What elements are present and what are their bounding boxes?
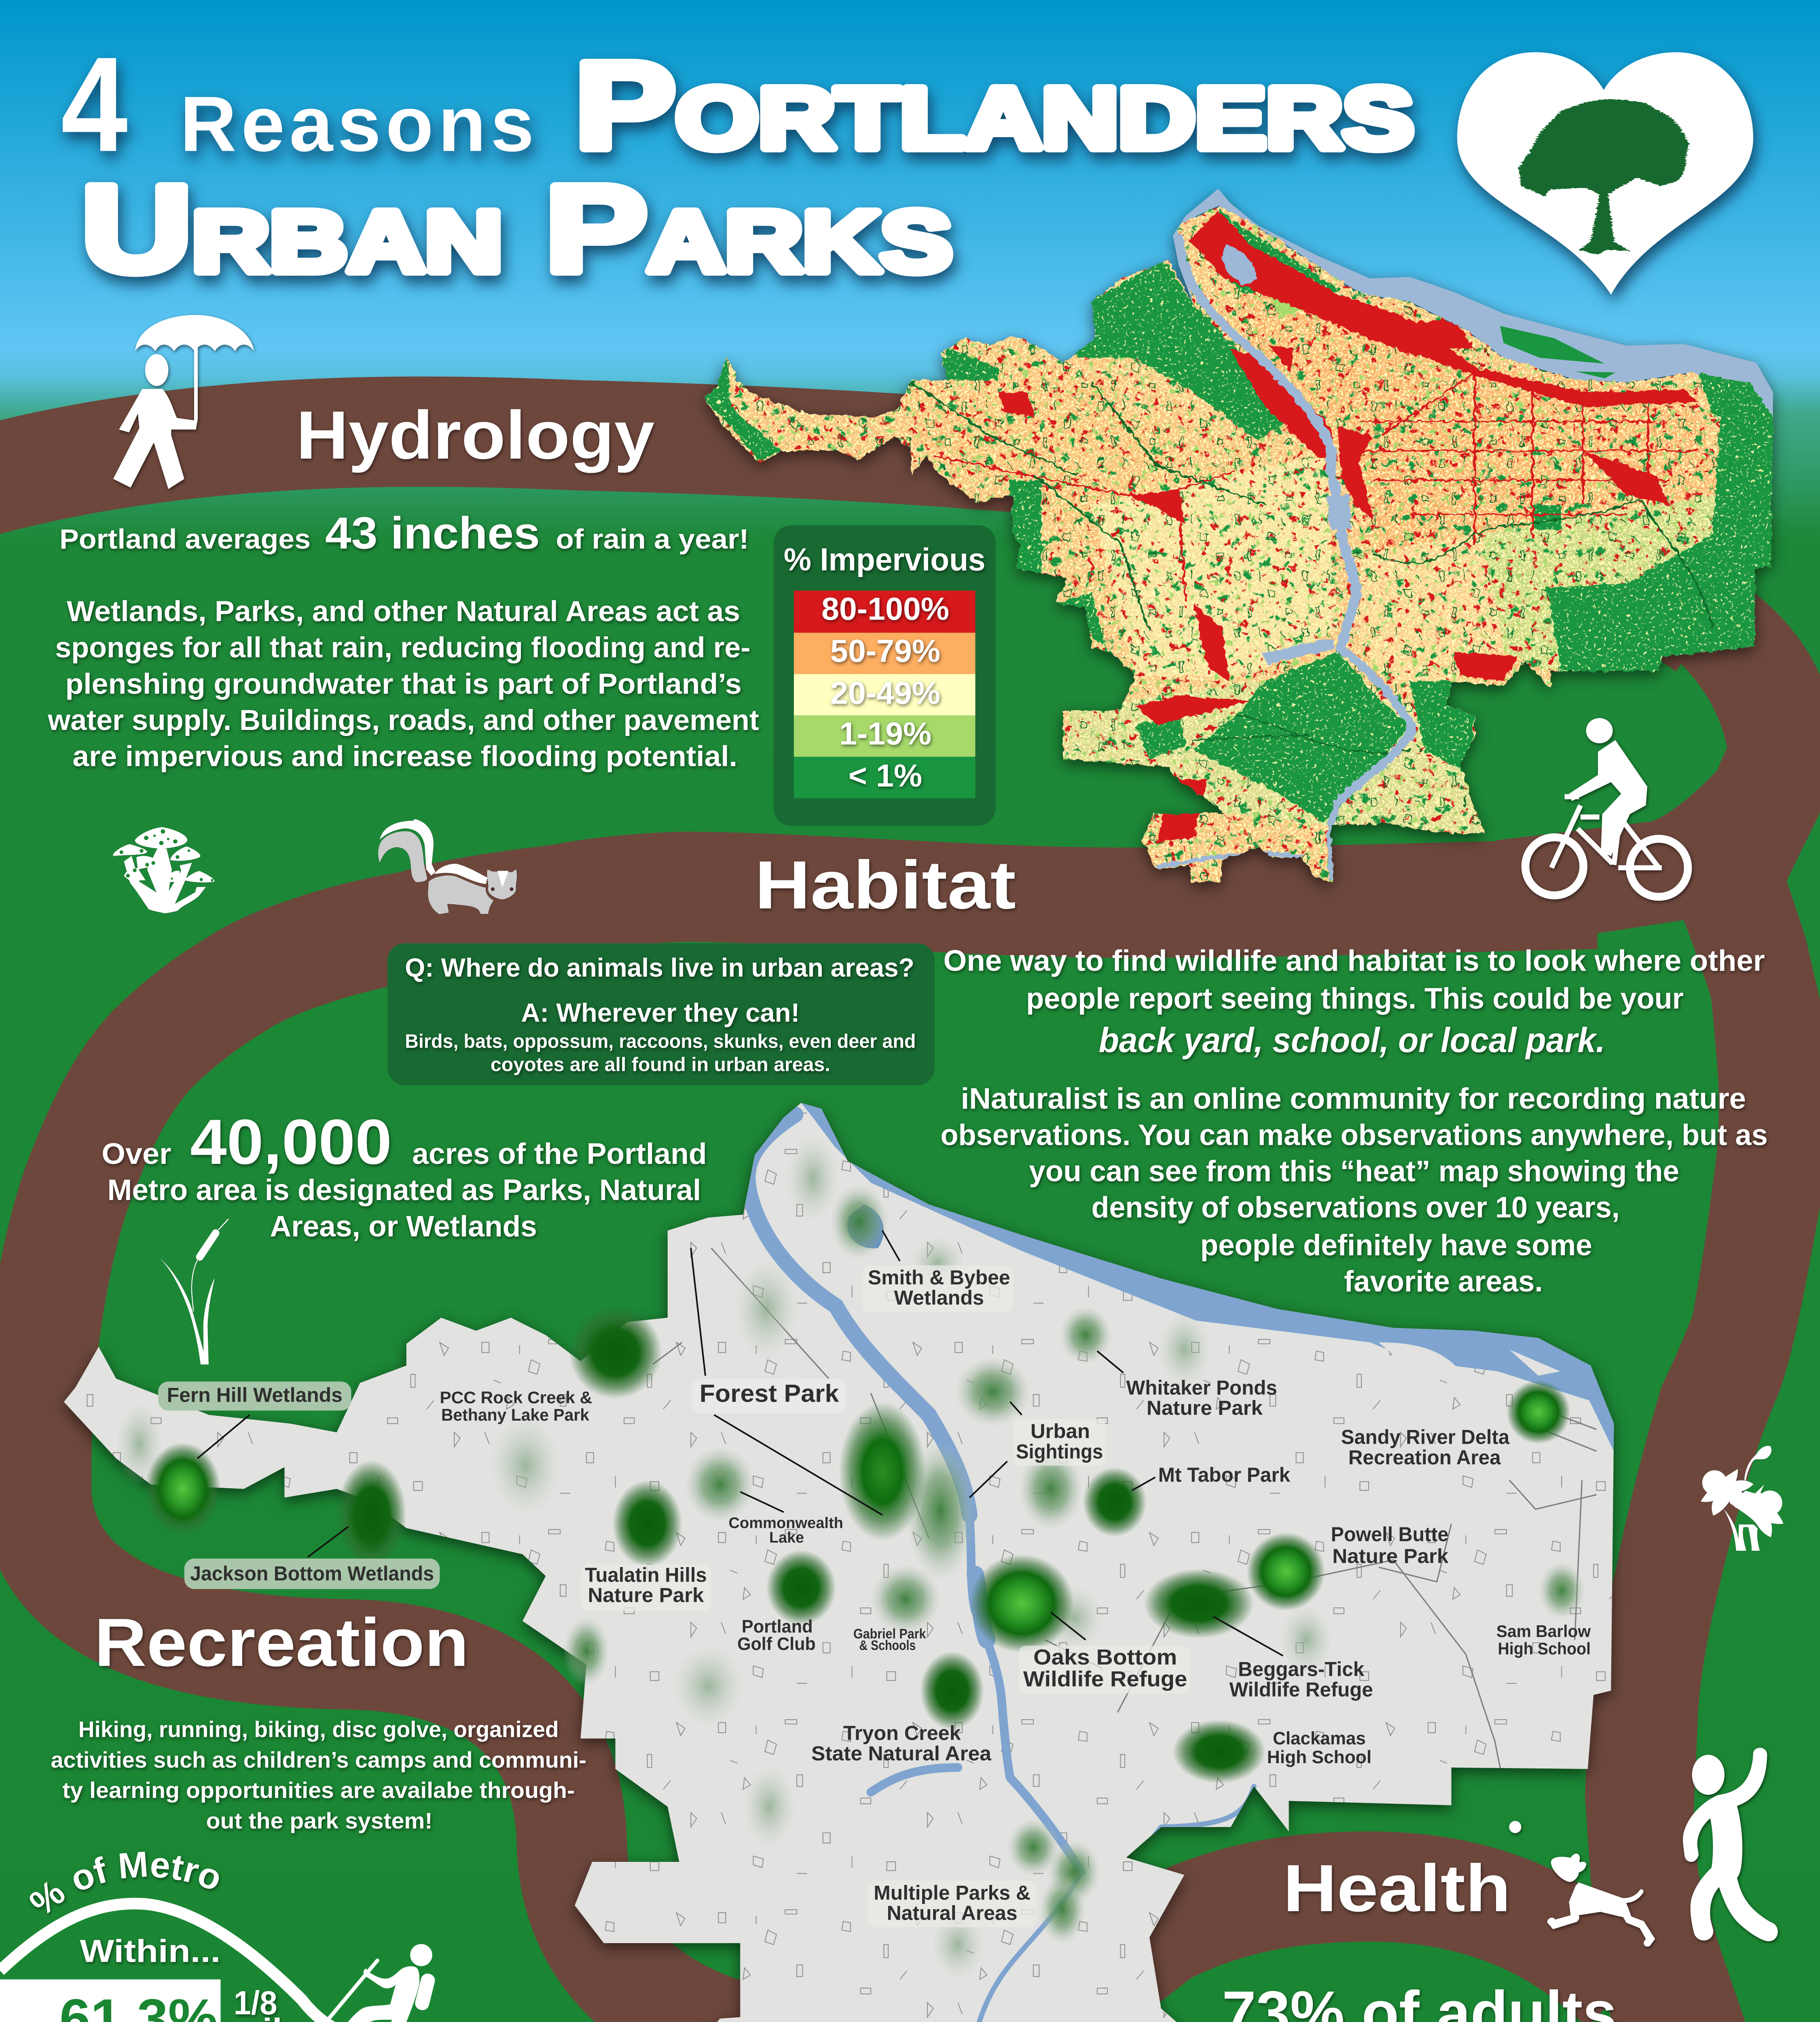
panel: Q and A: Birds, bats, oppossum, raccoons, skunks, even deer and xyxy=(405,1030,916,1052)
label: Portland Golf Club: Golf Club xyxy=(737,1633,816,1654)
text: find wildlife: people report seeing things. This could be your xyxy=(1026,981,1684,1015)
map labels xyxy=(158,1265,1591,1927)
panel: Q and A xyxy=(387,943,935,1085)
label: Tryon Creek: State Natural Area xyxy=(811,1742,992,1765)
icon: flowers xyxy=(1701,1446,1783,1551)
text: iNaturalist: iNaturalist is an online community for recording nature xyxy=(961,1082,1746,1115)
text: 40,000 acres: acres of the Portland xyxy=(412,1137,707,1170)
map: iNaturalist heat map xyxy=(58,1103,1625,2022)
label: Whitaker Ponds: Whitaker Ponds xyxy=(1126,1377,1277,1399)
text: find wildlife: back yard, school, or local park. xyxy=(1099,1021,1605,1060)
rivers xyxy=(720,1115,1254,2022)
title: 4 xyxy=(61,29,129,180)
text: rainfall: of rain a year! xyxy=(556,524,749,554)
label: Urban Sightings: Urban xyxy=(1031,1420,1090,1442)
label: Beggars-Tick: Beggars-Tick xyxy=(1238,1658,1364,1681)
text: recreation paragraph: activities such as children’s camps and communi- xyxy=(51,1747,586,1772)
panel: impervious legend xyxy=(774,525,996,826)
stat: 61.3 percent xyxy=(0,1980,220,2022)
icon: waving person xyxy=(1683,1748,1778,1941)
label: Tryon Creek xyxy=(811,1722,992,1765)
label: Smith and Bybee xyxy=(862,1265,1013,1312)
text: wetlands paragraph: Wetlands, Parks, and other Natural Areas act as xyxy=(67,595,740,628)
icon: cattail xyxy=(159,1219,229,1364)
text: rainfall xyxy=(59,508,749,558)
icon: skunk xyxy=(378,819,517,914)
arc title: % of Metro xyxy=(22,1844,227,1924)
text: 40,000 acres: Metro area is designated as Parks, Natural xyxy=(108,1173,701,1207)
label: Sam Barlow: High School xyxy=(1498,1639,1591,1658)
label: Oaks Bottom xyxy=(1019,1645,1190,1694)
text: find wildlife xyxy=(944,944,1765,1060)
label: Whitaker Ponds xyxy=(1126,1377,1277,1419)
label: Urban Sightings xyxy=(1013,1419,1106,1466)
label: Commonwealth Lake: Lake xyxy=(769,1529,804,1546)
panel: percent of metro hill: Within... xyxy=(80,1933,220,1969)
label: Portland Golf Club: Portland xyxy=(742,1616,813,1637)
label: Sandy River Delta: Recreation Area xyxy=(1348,1446,1501,1469)
text: 40,000 acres xyxy=(102,1106,707,1243)
panel: percent of metro hill: 1/8 xyxy=(234,1984,277,2022)
label: Sandy River Delta xyxy=(1341,1426,1510,1469)
text: wetlands paragraph: water supply. Buildings, roads, and other pavement xyxy=(47,704,759,736)
label: Portland Golf Club xyxy=(737,1616,816,1654)
title: Urban Parks xyxy=(81,160,952,298)
text: find wildlife: One way to find wildlife and habitat is to look where other xyxy=(944,944,1765,977)
hill line xyxy=(0,1904,522,2022)
label: Fern Hill Wetlands: Fern Hill Wetlands xyxy=(167,1383,343,1406)
text: 40,000 acres: Over xyxy=(102,1137,171,1170)
heading: Health: Health xyxy=(1283,1851,1511,1925)
text: wetlands paragraph: sponges for all that rain, reducing flooding and re- xyxy=(55,632,750,664)
text: 40,000 acres: Areas, or Wetlands xyxy=(270,1209,537,1243)
label: Whitaker Ponds: Nature Park xyxy=(1147,1397,1263,1419)
label: Multiple Parks: Natural Areas xyxy=(887,1902,1018,1925)
label: PCC Rock Creek: PCC Rock Creek & xyxy=(440,1388,592,1407)
label: Mt Tabor Park: Mt Tabor Park xyxy=(1158,1464,1290,1486)
leader lines xyxy=(197,1231,1283,1656)
text: recreation paragraph: Hiking, running, biking, disc golve, organized xyxy=(78,1717,559,1742)
panel: Q and A: coyotes are all found in urban areas. xyxy=(491,1053,830,1075)
text: 40,000 acres: 40,000 xyxy=(190,1106,392,1178)
label: Tualatin Hills: Nature Park xyxy=(588,1584,704,1607)
label: Commonwealth Lake xyxy=(728,1514,843,1546)
winding trail xyxy=(0,431,1820,2022)
text: iNaturalist: you can see from this “heat” map showing the xyxy=(1029,1154,1679,1188)
label: Urban Sightings: Sightings xyxy=(1016,1440,1103,1463)
panel: impervious legend: < 1% xyxy=(849,758,922,793)
text: iNaturalist xyxy=(940,1082,1768,1298)
label: Clackamas High School: Clackamas xyxy=(1273,1728,1366,1748)
label: Sam Barlow xyxy=(1496,1622,1591,1658)
label: Oaks Bottom: Wildlife Refuge xyxy=(1023,1667,1187,1691)
label: Tualatin Hills: Tualatin Hills xyxy=(585,1563,707,1586)
panel: Q and A: A: Wherever they can! xyxy=(521,998,800,1027)
label: Smith and Bybee: Smith & Bybee xyxy=(868,1266,1010,1289)
label: Tualatin Hills xyxy=(580,1563,711,1611)
label: Gabriel Park: Gabriel Park xyxy=(853,1626,926,1641)
text: wetlands paragraph: plenshing groundwater that is part of Portland’s xyxy=(65,668,742,700)
legend title: % Impervious xyxy=(784,541,986,577)
label: Sandy River Delta: Sandy River Delta xyxy=(1341,1426,1510,1449)
heading: Habitat: Habitat xyxy=(755,846,1016,923)
title: Reasons xyxy=(180,80,534,168)
label: Commonwealth Lake: Commonwealth xyxy=(728,1514,843,1531)
icon: hiker xyxy=(330,1944,436,2022)
text: iNaturalist: favorite areas. xyxy=(1344,1265,1543,1298)
panel: impervious legend: 20-49% xyxy=(830,675,940,711)
heading: Hydrology: Hydrology xyxy=(296,397,654,473)
label: PCC Rock Creek xyxy=(440,1388,592,1424)
text: recreation paragraph xyxy=(51,1717,586,1833)
label: Forest Park xyxy=(692,1379,846,1413)
heat blobs xyxy=(116,1135,1585,1980)
panel: impervious legend: 50-79% xyxy=(830,633,940,668)
panel: impervious legend: 1-19% xyxy=(839,716,931,751)
icon: dog and ball xyxy=(1509,1821,1655,1946)
label: Tryon Creek: Tryon Creek xyxy=(843,1722,961,1745)
label: Powell Butte xyxy=(1331,1523,1448,1567)
text: wetlands paragraph xyxy=(47,595,759,773)
icon: cyclist xyxy=(1526,718,1688,897)
text: rainfall: Portland averages xyxy=(59,524,311,554)
label: Powell Butte: Powell Butte xyxy=(1331,1523,1448,1546)
panel: percent of metro hill xyxy=(0,1844,522,2022)
label: Sam Barlow: Sam Barlow xyxy=(1496,1622,1591,1641)
label: Clackamas High School: High School xyxy=(1267,1747,1371,1767)
text: recreation paragraph: out the park system! xyxy=(206,1808,432,1833)
trail lines xyxy=(653,1248,1596,1814)
label: Multiple Parks: Multiple Parks & xyxy=(874,1881,1031,1904)
panel: impervious legend: 80-100% xyxy=(821,591,949,626)
label: PCC Rock Creek: Bethany Lake Park xyxy=(441,1406,589,1424)
icon: walker with umbrella xyxy=(113,315,254,489)
icon: heart with tree xyxy=(1457,52,1753,294)
label: Beggars-Tick xyxy=(1229,1658,1373,1701)
text: rainfall: 43 inches xyxy=(325,508,540,558)
text: wetlands paragraph: are impervious and increase flooding potential. xyxy=(72,740,737,773)
label: Gabriel Park: & Schools xyxy=(859,1638,916,1653)
label: Clackamas High School xyxy=(1267,1728,1371,1767)
label: Jackson Bottom Wetlands: Jackson Bottom Wetlands xyxy=(190,1562,434,1585)
label: Forest Park: Forest Park xyxy=(700,1379,839,1407)
label: Oaks Bottom: Oaks Bottom xyxy=(1033,1645,1177,1669)
icon: mushrooms xyxy=(113,827,215,913)
text: iNaturalist: observations. You can make observations anywhere, but as xyxy=(940,1118,1768,1151)
heading: Recreation: Recreation xyxy=(94,1604,469,1681)
label: Multiple Parks xyxy=(868,1881,1036,1927)
title xyxy=(61,29,1414,298)
label: Beggars-Tick: Wildlife Refuge xyxy=(1229,1678,1373,1701)
label: Gabriel Park xyxy=(853,1626,926,1653)
text: iNaturalist: density of observations over 10 years, xyxy=(1092,1191,1620,1224)
map: percent impervious xyxy=(688,182,1800,907)
text: iNaturalist: people definitely have some xyxy=(1200,1228,1592,1262)
panel: Q and A: Q: Where do animals live in urban areas? xyxy=(405,953,914,982)
label: Smith and Bybee: Wetlands xyxy=(894,1286,984,1309)
title: Portlanders xyxy=(575,36,1414,174)
text: recreation paragraph: ty learning opportunities are availabe through- xyxy=(62,1778,575,1803)
label: Powell Butte: Nature Park xyxy=(1332,1545,1448,1567)
